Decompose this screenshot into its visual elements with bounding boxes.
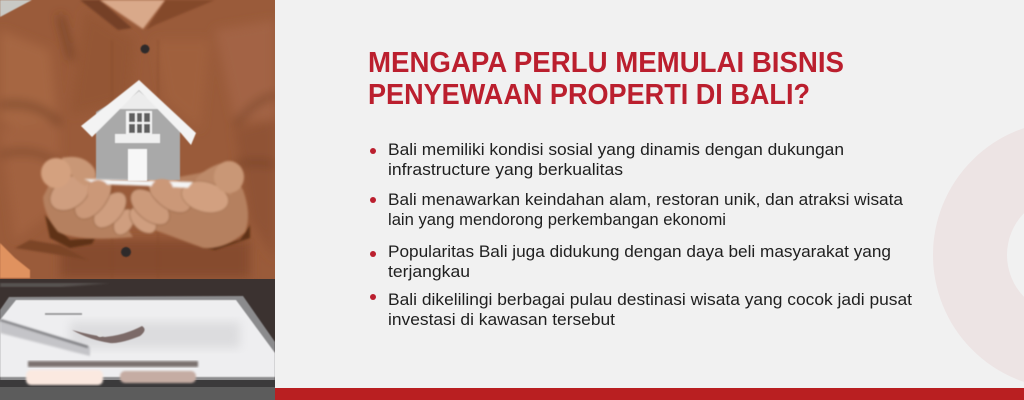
left fingers (114, 208, 134, 235)
photo: hands holding a model house over a document (0, 0, 275, 400)
palms (42, 173, 133, 240)
decorative donut shape (933, 128, 1024, 382)
bullet item 3: Popularitas Bali juga didukung dengan daya beli masyarakat yang (388, 243, 891, 261)
fingertips over house base (84, 178, 194, 194)
pen (0, 321, 90, 356)
bullet item 2 (370, 191, 904, 229)
bullet list (370, 141, 913, 329)
bullet item 1: infrastructure yang berkualitas (388, 161, 623, 179)
placket line (112, 40, 158, 278)
bullet item 2: Bali menawarkan keindahan alam, restoran unik, dan atraksi wisata (388, 191, 904, 209)
bullet item 1: Bali memiliki kondisi sosial yang dinamis dengan dukungan (388, 141, 844, 159)
hands (41, 157, 248, 248)
bullet item 4 (370, 291, 913, 329)
title: PENYEWAAN PROPERTI DI BALI? (368, 79, 810, 111)
bullet item 3: terjangkau (388, 263, 470, 281)
title: MENGAPA PERLU MEMULAI BISNIS (368, 47, 844, 79)
bottom red bar (275, 388, 1024, 400)
keys (72, 326, 145, 343)
shirt background (0, 0, 275, 280)
table and document (0, 279, 275, 400)
right fingers (128, 207, 156, 234)
sleeve cuffs (15, 215, 250, 260)
model house (81, 80, 196, 181)
bullet item 4: investasi di kawasan tersebut (388, 311, 615, 329)
bullet item 4: Bali dikelilingi berbagai pulau destinasi wisata yang cocok jadi pusat (388, 291, 913, 309)
bullet item 2: lain yang mendorong perkembangan ekonomi (388, 211, 726, 229)
bullet item 3 (370, 243, 891, 281)
bullet item 1 (370, 141, 844, 179)
shirt buttons (140, 44, 150, 54)
neck and collar (80, 0, 132, 30)
title (368, 47, 844, 111)
